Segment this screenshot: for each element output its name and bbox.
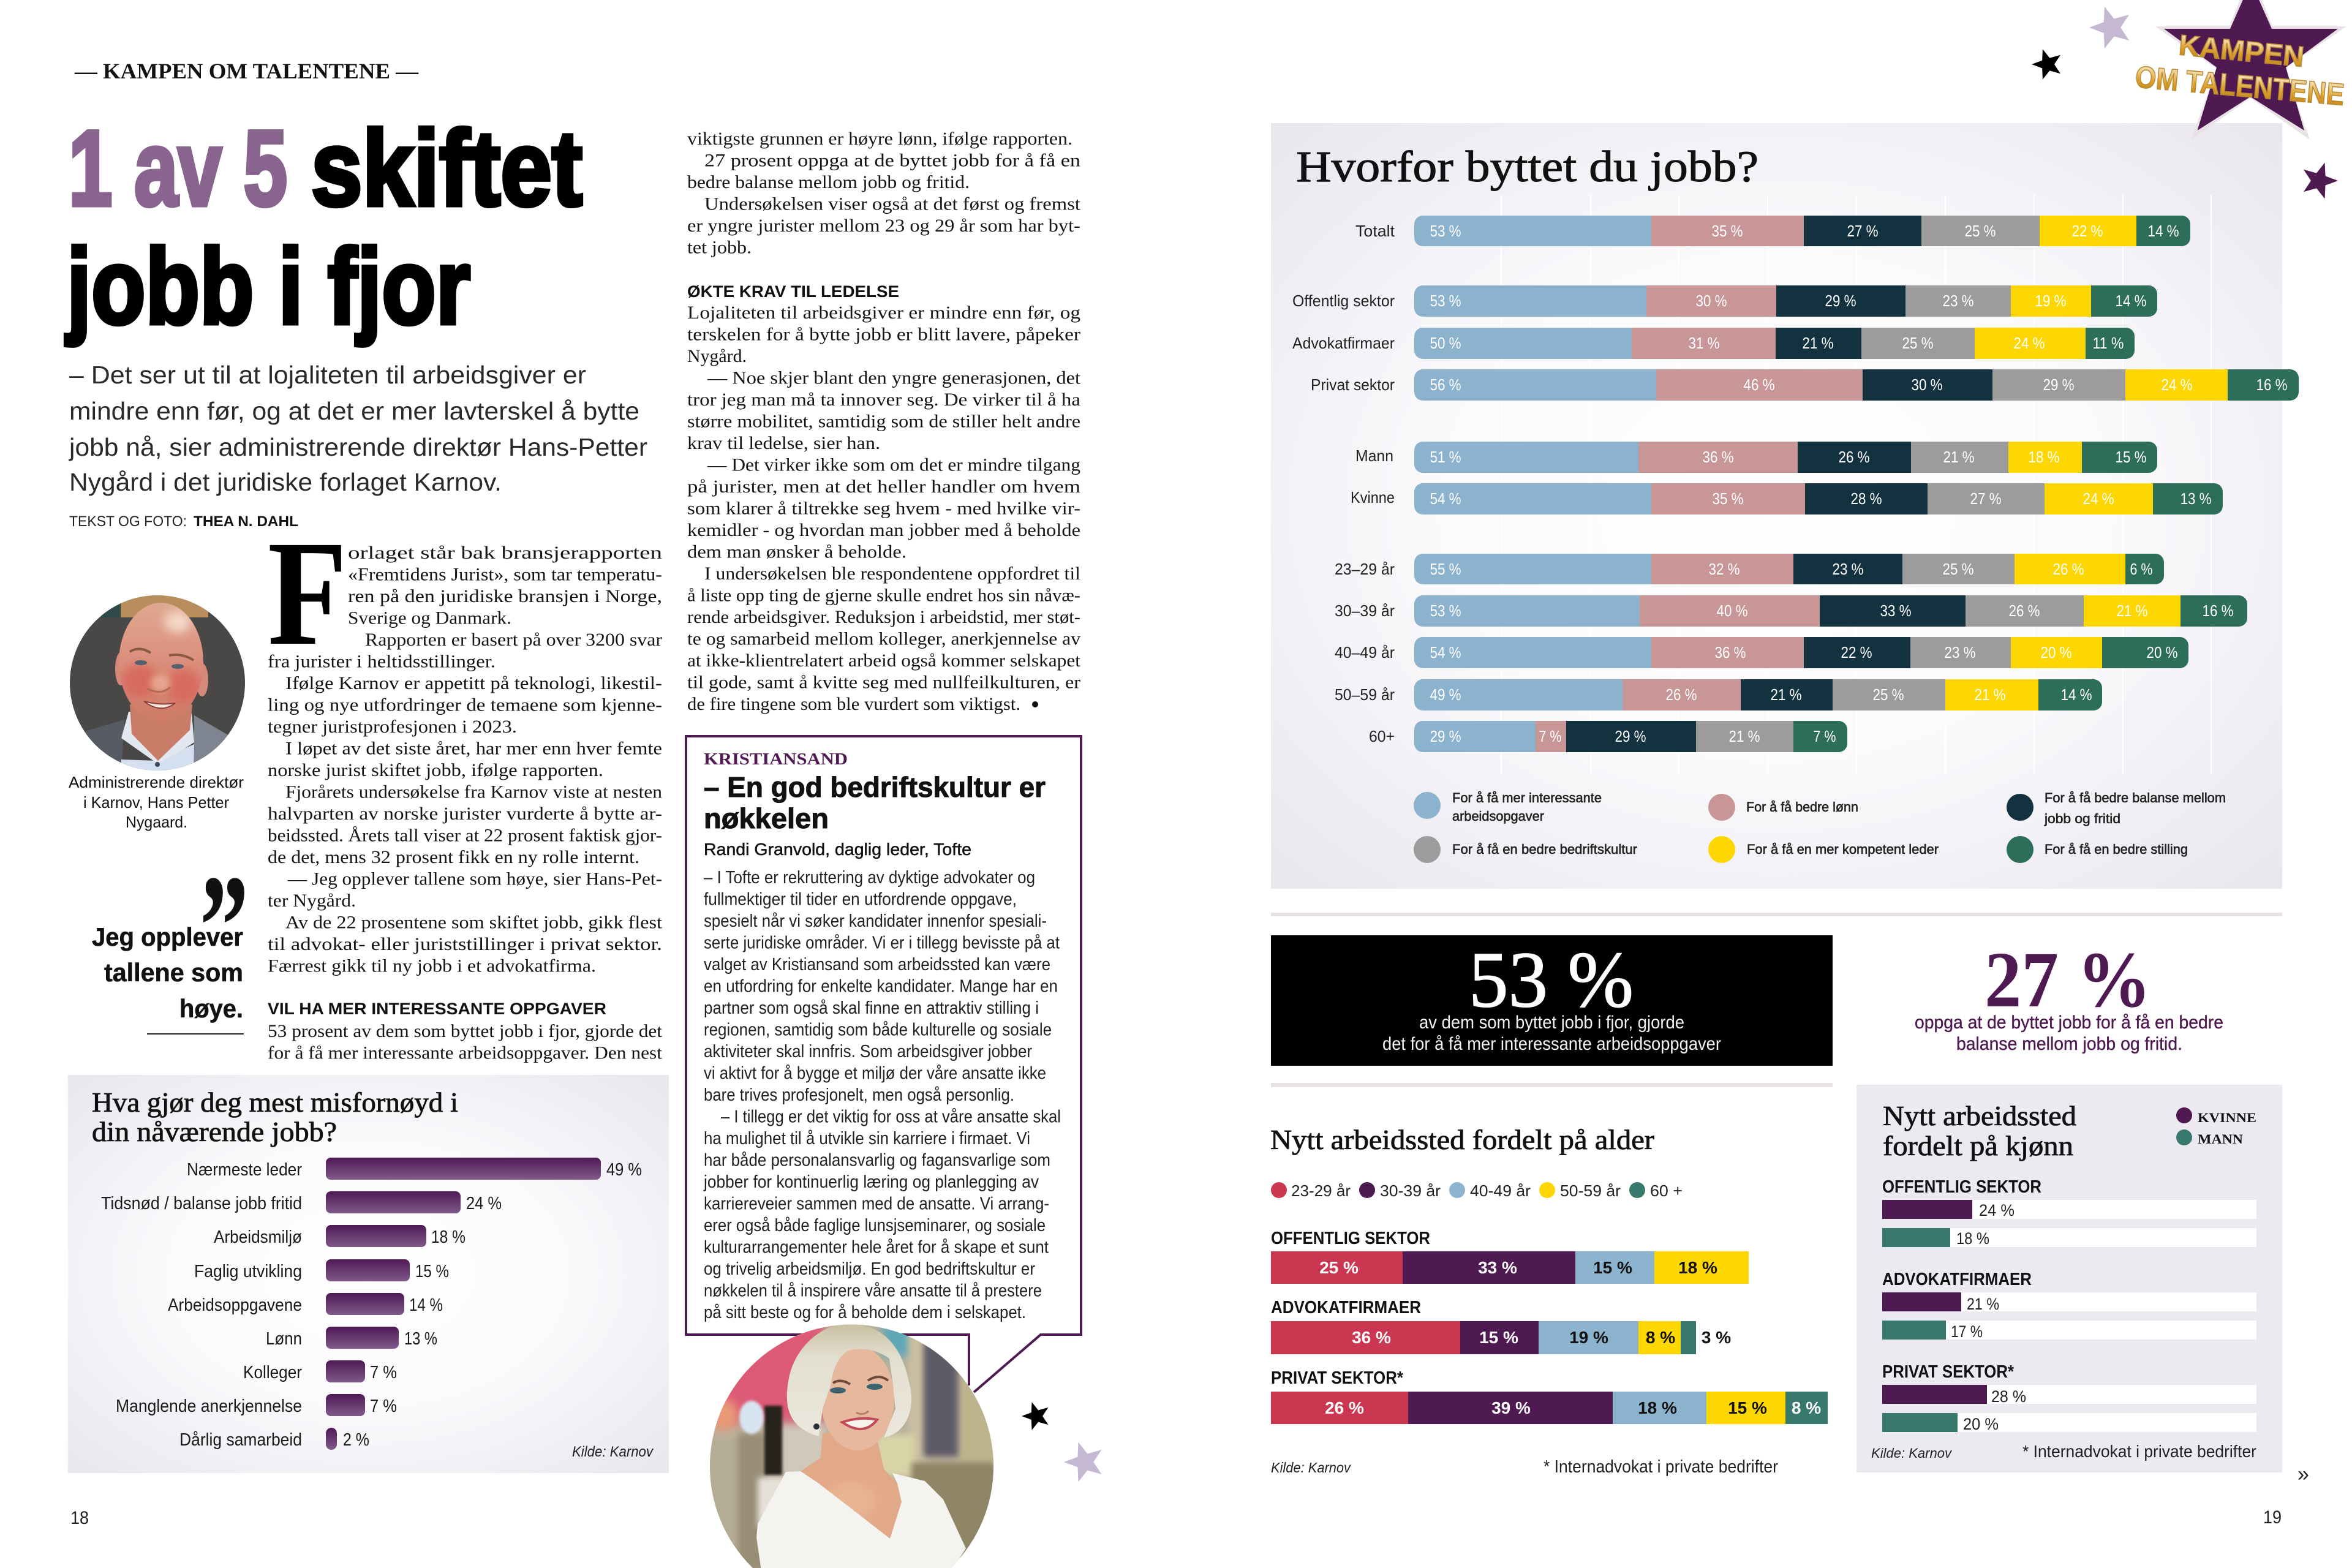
body text column 2: — Det virker ikke som om det er mindre tilgang [707, 454, 1080, 475]
callout body text: vi aktivt for å bygge et miljø der våre ansatte ikke [704, 1063, 1046, 1083]
stacked bar: 60+: 29 % [1430, 727, 1461, 745]
stacked bar: 60+: 21 % [1728, 727, 1760, 745]
drop cap F: F [268, 510, 347, 677]
stacked bar: Privat sektor: 30 % [1911, 375, 1943, 394]
stacked bar: Advokatfirmaer: 21 % [1802, 334, 1834, 352]
callout body text: aktiviteter skal innfris. Som arbeidsgiver jobber [704, 1042, 1032, 1061]
chart legend: jobb og fritid [2044, 811, 2120, 826]
stacked bar: 40-49 år [1335, 637, 2188, 668]
stacked bar: Kvinne [1351, 483, 2223, 514]
horizontal bar chart: Tidsnød / balanse jobb fritid [101, 1194, 302, 1213]
chart legend: For å få en bedre stilling [2045, 842, 2188, 857]
bars: privat sektor: 28 % [1991, 1387, 2026, 1406]
stacked bar: Advokatfirmaer: 25 % [1902, 334, 1933, 352]
icon: lilac star left page [1064, 1442, 1102, 1482]
stacked bar: 30-39 år [1335, 595, 2247, 627]
body text column 1: Rapporten er basert på over 3200 svar [365, 630, 662, 650]
stacked bar: 30-39 år: 21 % [2117, 601, 2147, 620]
stacked bar: Totalt: 35 % [1711, 222, 1743, 240]
body text column 2: viktigste grunnen er høyre lønn, ifølge rapporten. [687, 129, 1072, 149]
callout headline [704, 771, 1046, 834]
stacked bar: 50-59 år: 21 % [1770, 685, 1802, 704]
stacked bar: Kvinne: 35 % [1713, 489, 1743, 508]
stacked bar: 50-59 år: 50–59 år [1335, 685, 1395, 704]
chart legend: For å få en mer kompetent leder [1747, 842, 1939, 857]
panel: Hvorfor byttet du jobb [1271, 123, 2299, 889]
bars: privat sektor: PRIVAT SEKTOR* [1882, 1362, 2015, 1382]
bars: privat sektor [1882, 1362, 2256, 1433]
page number 19: 19 [2263, 1507, 2282, 1528]
source note and footnote [1271, 1457, 1778, 1477]
body text column 2: til gode, samt å kvitte seg med nullfeilkulturen, er [687, 673, 1080, 692]
body text column 1: halvparten av norske jurister vurderte å bytte ar- [268, 804, 662, 824]
stacked bar: Kvinne: Kvinne [1351, 488, 1395, 507]
stacked bar: Mann: 36 % [1703, 448, 1733, 466]
stacked bar: 40-49 år: 54 % [1430, 643, 1461, 662]
body text column 2: større mobilitet, samtidig som de stiller helt andre [687, 412, 1080, 431]
callout body text: en utfordring for enkelte kandidater. Mange har en [704, 976, 1058, 996]
callout body text: fullmektiger til tider en utfordrende oppgave, [704, 889, 1017, 909]
stacked bar: Mann: 15 % [2116, 448, 2146, 466]
gender legend: KVINNE [2198, 1110, 2256, 1125]
callout headline: – En god bedriftskultur er [704, 771, 1046, 803]
body text column 2: ØKTE KRAV TIL LEDELSE [687, 282, 899, 301]
body text column 2: rende arbeidsgiver. Reduksjon i arbeidstid, mer støt- [687, 607, 1080, 627]
stacked bar: 23-29 år: 6 % [2130, 560, 2152, 578]
stacked bar: Offentlig sektor: Offentlig sektor [1292, 292, 1395, 310]
stacked bar: Privat sektor: 29 % [2043, 375, 2074, 394]
body text column 2: å liste opp ting de gjerne skulle endret hos sin nåvæ- [687, 586, 1080, 605]
stacked bar: 23-29 år: 23 % [1833, 560, 1863, 578]
stacked bar: Kvinne: 28 % [1851, 489, 1882, 508]
stacked bar: Advokatfirmaer [1292, 328, 2135, 359]
stacked bar: Advokatfirmaer: 50 % [1430, 334, 1461, 352]
bars: offentlig sektor: OFFENTLIG SEKTOR [1882, 1177, 2041, 1197]
main headline [66, 109, 582, 347]
bars: advokatfirmaer: 17 % [1951, 1322, 1983, 1341]
age legend: 60 + [1650, 1182, 1683, 1200]
stacked bar: Privat sektor: 56 % [1430, 375, 1461, 394]
icon: black star top [2032, 49, 2060, 80]
stacked bar: 50-59 år: 49 % [1430, 685, 1461, 704]
stacked bar: 30-39 år: 40 % [1716, 601, 1748, 620]
horizontal bar chart: Arbeidsoppgavene [168, 1295, 302, 1315]
horizontal bar chart: 15 % [415, 1262, 449, 1281]
body text column 1: I løpet av det siste året, har mer enn hver femte [285, 739, 662, 758]
byline: TEKST OG FOTO: [69, 513, 187, 530]
bars: offentlig sektor: 18 % [1956, 1229, 1989, 1248]
stacked bar: Mann: Mann [1355, 447, 1393, 465]
icon: purple star right [2297, 157, 2342, 201]
bar: offentlig sektor: 18 % [1678, 1258, 1717, 1277]
body text column 1: VIL HA MER INTERESSANTE OPPGAVER [268, 1000, 606, 1018]
stat: 27 %: balanse mellom jobb og fritid. [1956, 1034, 2182, 1054]
bars: advokatfirmaer [1882, 1270, 2256, 1341]
stacked bar: 60+: 29 % [1615, 727, 1646, 745]
horizontal bar chart: 49 % [606, 1160, 642, 1180]
chart legend: arbeidsopgaver [1452, 809, 1544, 824]
bar: advokatfirmaer: 3 % [1702, 1328, 1731, 1347]
chart legend: For å få mer interessante [1452, 790, 1602, 805]
stacked bar: Privat sektor: 24 % [2161, 375, 2193, 394]
callout body text: kulturarrangementer hele året for å skape et sunt [704, 1237, 1049, 1257]
body text column 2: terskelen for å bytte jobb er blitt lavere, påpeker [687, 325, 1080, 344]
stacked bar: Mann: 51 % [1430, 448, 1461, 466]
horizontal bar chart: 7 % [370, 1363, 397, 1382]
standfirst: mindre enn før, og at det er mer lavterskel å bytte [69, 397, 639, 425]
callout body text: – I tillegg er det viktig for oss at våre ansatte skal [721, 1107, 1061, 1127]
horizontal bar chart: 2 % [343, 1430, 369, 1450]
body text column 2: I undersøkelsen ble respondentene oppfordret til [704, 564, 1080, 584]
gender legend [2176, 1107, 2256, 1147]
body text column 1: ling og nye utfordringer de temaene som kjenne- [268, 695, 662, 715]
stacked bar: 23-29 år: 32 % [1709, 560, 1740, 578]
panel title [1883, 1101, 2076, 1161]
stacked bar: Privat sektor: Privat sektor [1311, 375, 1395, 394]
photo caption: i Karnov, Hans Petter [83, 793, 229, 812]
chart legend: For å få bedre balanse mellom [2045, 790, 2226, 805]
bar: privat sektor: 8 % [1792, 1398, 1821, 1417]
body text column 1: orlaget står bak bransjerapporten [348, 543, 662, 563]
body text column 2: Nygård. [687, 346, 747, 366]
callout body text: jobber for kontinuerlig læring og planlegging av [703, 1172, 1039, 1192]
body text column 2: at ikke-klientrelatert arbeid også kommer selskapet [687, 650, 1081, 671]
bar: offentlig sektor: OFFENTLIG SEKTOR [1271, 1229, 1430, 1248]
callout body text: på sitt beste og for å beholde dem i selskapet. [704, 1303, 1026, 1322]
stacked bar: 30-39 år: 53 % [1430, 601, 1461, 620]
body text column 1 [268, 543, 663, 1063]
panel title: Nytt arbeidssted [1883, 1101, 2076, 1131]
callout body text: serte juridiske områder. Vi er i tillegg bevisste på at [704, 933, 1060, 953]
callout kicker: KRISTIANSAND [704, 750, 848, 768]
pull quote: høye. [179, 994, 243, 1023]
photo caption: Nygaard. [126, 813, 187, 831]
photo caption [69, 773, 244, 831]
bar: advokatfirmaer: ADVOKATFIRMAER [1271, 1298, 1421, 1317]
standfirst: Nygård i det juridiske forlaget Karnov. [69, 468, 502, 496]
body text column 2: 27 prosent oppga at de byttet jobb for å få en [704, 151, 1080, 170]
body text column 2: tror jeg man må ta innover seg. De virker til å ha [687, 390, 1080, 410]
horizontal bar chart: Lønn [266, 1329, 302, 1349]
badge: Kampen om talentene star [2134, 0, 2346, 140]
horizontal bar chart: Manglende anerkjennelse [116, 1396, 302, 1416]
horizontal bar chart: Kolleger [243, 1363, 302, 1382]
stacked bar: Offentlig sektor: 53 % [1430, 292, 1461, 310]
bar: offentlig sektor: 33 % [1478, 1258, 1517, 1277]
horizontal bar chart [101, 1158, 642, 1450]
bar: privat sektor: 18 % [1638, 1398, 1677, 1417]
horizontal bar chart: 14 % [409, 1295, 443, 1315]
bar: advokatfirmaer: 8 % [1646, 1328, 1675, 1347]
bar: advokatfirmaer: 19 % [1569, 1328, 1608, 1347]
source note and footnote: * Internadvokat i private bedrifter [1544, 1457, 1778, 1477]
body text column 2: de fire tingene som ble vurdert som viktigst. [687, 694, 1020, 714]
body text column 1: de det, mens 32 prosent fikk en ny rolle internt. [268, 847, 639, 867]
stacked bar: Offentlig sektor [1292, 285, 2157, 317]
stacked bar: Privat sektor: 46 % [1743, 375, 1775, 394]
bar: privat sektor: 26 % [1325, 1398, 1364, 1417]
body text column 2: på jurister, men at det heller handler om hvem [687, 477, 1080, 497]
stacked bar: 50-59 år [1335, 679, 2102, 710]
panel: Hva gjør deg mest misfornøyd [68, 1075, 669, 1473]
stacked bar: Advokatfirmaer: 31 % [1688, 334, 1720, 352]
callout body text: bare trives profesjonelt, men også personlig. [704, 1085, 1014, 1105]
bar: offentlig sektor [1271, 1229, 1749, 1284]
callout body text: spesielt når vi søker kandidater innenfor spesiali- [704, 911, 1047, 931]
standfirst: jobb nå, sier administrerende direktør Hans-Petter [69, 433, 647, 461]
body text column 1: beidssted. Årets tall viser at 22 prosent faktisk gjor- [268, 826, 662, 845]
body text column 1: for å få mer interessante arbeidsoppgaver. Den nest [268, 1042, 663, 1063]
age legend: 50-59 år [1560, 1182, 1621, 1200]
stacked bar: Advokatfirmaer: Advokatfirmaer [1292, 334, 1395, 352]
callout body text: karriereveier sammen med de ansatte. Vi arrang- [704, 1194, 1049, 1214]
body text column 1: fra jurister i heltidsstillinger. [268, 652, 496, 671]
stacked bar: Mann: 21 % [1943, 448, 1975, 466]
body text column 1: Av de 22 prosentene som skiftet jobb, gikk flest [285, 913, 663, 932]
callout body text: erer også både faglige lunsjseminarer, og sosiale [704, 1216, 1046, 1235]
stacked bar: Totalt: Totalt [1355, 222, 1395, 240]
body text column 1: Fjorårets undersøkelse fra Karnov viste at nesten [285, 782, 662, 802]
stacked bar: 60+ [1369, 721, 1847, 752]
stacked bar: 40-49 år: 22 % [1841, 643, 1872, 662]
main headline: jobb i fjor [66, 227, 470, 347]
body text column 1: Ifølge Karnov er appetitt på teknologi, likestil- [285, 673, 662, 693]
stacked bar: Offentlig sektor: 30 % [1695, 292, 1727, 310]
bar: privat sektor: 39 % [1491, 1398, 1531, 1417]
body text column 1: norske jurist skiftet jobb, ifølge rapporten. [268, 760, 603, 780]
stacked bar: 23-29 år: 26 % [2053, 560, 2084, 578]
stacked bar: Kvinne: 54 % [1430, 489, 1461, 508]
callout byline: Randi Granvold, daglig leder, Tofte [704, 840, 971, 859]
callout body text: ha mulighet til å utvikle sin karriere i firmaet. Vi [704, 1129, 1030, 1148]
source note and footnote: Kilde: Karnov [1871, 1446, 1953, 1461]
callout body text: regionen, samtidig som både kulturelle og sosiale [704, 1020, 1052, 1040]
source note and footnote: Kilde: Karnov [1271, 1460, 1351, 1476]
stacked bar: Totalt [1355, 216, 2190, 246]
panel title: fordelt på kjønn [1883, 1131, 2073, 1161]
pull quote: ” [200, 845, 249, 1008]
stacked bar: Advokatfirmaer: 24 % [2014, 334, 2045, 352]
stacked bar: Offentlig sektor: 23 % [1943, 292, 1973, 310]
standfirst [69, 361, 647, 496]
main headline: 1 av 5 [69, 109, 287, 228]
stacked bar: Offentlig sektor: 19 % [2035, 292, 2067, 310]
bar: privat sektor: PRIVAT SEKTOR* [1271, 1368, 1404, 1388]
horizontal bar chart: Dårlig samarbeid [179, 1430, 302, 1450]
body text column 1: ren på den juridiske bransjen i Norge, [348, 586, 662, 606]
horizontal bar chart: 18 % [431, 1227, 466, 1247]
stacked bar: Totalt: 25 % [1965, 222, 1996, 240]
stacked bar: 23-29 år: 23–29 år [1335, 560, 1395, 578]
stacked bar: 23-29 år: 55 % [1430, 560, 1461, 578]
pull quote: tallene som [104, 958, 243, 987]
horizontal bar chart: Arbeidsmiljø [214, 1227, 302, 1247]
body text column 2 [687, 129, 1081, 714]
body text column 2: te og samarbeid mellom kolleger, anerkjennelse av [687, 628, 1080, 649]
standfirst: – Det ser ut til at lojaliteten til arbeidsgiver er [69, 361, 586, 389]
chart legend [1414, 790, 2226, 863]
stacked bar: 40-49 år: 23 % [1944, 643, 1976, 662]
chart title: Nytt arbeidssted fordelt på alder [1270, 1125, 1654, 1155]
stacked bar: Totalt: 22 % [2071, 222, 2103, 240]
chart grid lines [1501, 195, 2211, 774]
photo caption: Administrerende direktør [69, 773, 244, 791]
stacked bar: Totalt: 14 % [2147, 222, 2179, 240]
bar: advokatfirmaer: 15 % [1479, 1328, 1518, 1347]
chart legend: For å få bedre lønn [1746, 799, 1858, 815]
stacked bar: 30-39 år: 30–39 år [1335, 601, 1395, 620]
callout body text [703, 868, 1061, 1322]
bar: advokatfirmaer: 36 % [1352, 1328, 1391, 1347]
page number 18: 18 [70, 1508, 89, 1528]
body text column 1: ter Nygård. [268, 891, 356, 911]
body text column 1: 53 prosent av dem som byttet jobb i fjor, gjorde det [268, 1021, 663, 1041]
stacked bar: Offentlig sektor: 29 % [1825, 292, 1856, 310]
bars: advokatfirmaer: 21 % [1967, 1295, 1999, 1313]
gender legend: MANN [2198, 1131, 2243, 1147]
stacked bar: 30-39 år: 33 % [1880, 601, 1911, 620]
bar: privat sektor: 15 % [1728, 1398, 1767, 1417]
stat box: 53 %: det for å få mer interessante arbeidsoppgaver [1382, 1034, 1721, 1054]
bars: privat sektor: 20 % [1963, 1415, 1999, 1433]
stacked bar: Kvinne: 27 % [1970, 489, 2002, 508]
callout headline: nøkkelen [704, 802, 829, 834]
bar: privat sektor [1271, 1368, 1828, 1424]
stacked bar: 23-29 år: 25 % [1943, 560, 1973, 578]
body text column 2: Lojaliteten til arbeidsgiver er mindre enn før, og [687, 303, 1080, 323]
badge: Kampen om talentene star: KAMPEN [2177, 28, 2305, 73]
source note: Kilde: Karnov [572, 1444, 654, 1460]
body text column 2: tet jobb. [687, 238, 752, 257]
main headline: skiftet [311, 109, 582, 228]
stacked bar: Privat sektor: 16 % [2256, 375, 2287, 394]
kicker: section label: — KAMPEN OM TALENTENE — [74, 59, 419, 83]
body text column 1: «Fremtidens Jurist», som tar temperatu- [348, 565, 662, 584]
stacked bar: 50-59 år: 14 % [2060, 685, 2092, 704]
source note and footnote [1871, 1442, 2256, 1461]
stacked bar: 30-39 år: 26 % [2009, 601, 2040, 620]
stacked bar: Kvinne: 13 % [2180, 489, 2211, 508]
bar: advokatfirmaer [1271, 1298, 1731, 1354]
stacked bar: 50-59 år: 26 % [1666, 685, 1697, 704]
body text column 1: Færrest gikk til ny jobb i et advokatfirma. [268, 956, 596, 976]
continuation arrow: » [2297, 1463, 2309, 1486]
source note and footnote: * Internadvokat i private bedrifter [2022, 1442, 2256, 1461]
body text column 2: dem man ønsker å beholde. [687, 541, 907, 562]
stacked bar: 40-49 år: 20 % [2041, 643, 2071, 662]
stacked bar: 50-59 år: 25 % [1873, 685, 1904, 704]
stacked bar: 50-59 år: 21 % [1975, 685, 2005, 704]
stat box: 53 %: av dem som byttet jobb i fjor, gjorde [1419, 1012, 1684, 1033]
bars: advokatfirmaer: ADVOKATFIRMAER [1882, 1270, 2032, 1289]
panel: Nytt arbeidssted fordelt på kjønn [1856, 1085, 2282, 1472]
stacked bar: Totalt: 27 % [1847, 222, 1878, 240]
stacked bar: Kvinne: 24 % [2082, 489, 2114, 508]
stacked bar: 40-49 år: 36 % [1715, 643, 1746, 662]
panel title: Hva gjør deg mest misfornøyd i [92, 1087, 458, 1118]
panel title: Hvorfor byttet du jobb? [1296, 142, 1758, 191]
body text column 2: krav til ledelse, sier han. [687, 433, 880, 453]
stacked bar: Totalt: 53 % [1430, 222, 1461, 240]
callout body text: partner som også skal finne en attraktiv stilling i [704, 998, 1039, 1018]
body text column 1: — Jeg opplever tallene som høye, sier Hans-Pet- [287, 869, 662, 889]
age legend: 40-49 år [1470, 1182, 1531, 1200]
callout: Kristiansand speech box [686, 736, 1081, 1392]
bars: offentlig sektor: 24 % [1979, 1201, 2015, 1219]
body text column 2: bedre balanse mellom jobb og fritid. [687, 172, 970, 192]
age legend: 23-29 år [1291, 1182, 1351, 1200]
stat: 27 %: oppga at de byttet jobb for å få en bedre [1915, 1012, 2223, 1033]
stacked bar: 30-39 år: 16 % [2203, 601, 2233, 620]
stacked bar: 60+: 7 % [1813, 727, 1836, 745]
bars: offentlig sektor [1882, 1177, 2256, 1248]
stacked bar: Mann [1355, 442, 2157, 473]
body text column 1: til advokat- eller juriststillinger i privat sektor. [268, 934, 662, 954]
body text column 1: Sverige og Danmark. [348, 608, 511, 628]
chart: Nytt arbeidssted fordelt på alder [1270, 1125, 1828, 1477]
pull quote: Jeg opplever [92, 922, 243, 951]
body text column 2: kemidler - og hvordan man jobber med å beholde [687, 520, 1080, 540]
stat: 27 % [1915, 936, 2223, 1054]
callout body text: – I Tofte er rekruttering av dyktige advokater og [704, 868, 1035, 888]
stacked bar: 40-49 år: 20 % [2146, 643, 2178, 662]
body text column 2: Undersøkelsen viser også at det først og fremst [704, 194, 1081, 214]
byline: THEA N. DAHL [194, 513, 298, 530]
photo: portrait of Hans-Petter Nygård [67, 593, 248, 774]
stacked bar: Advokatfirmaer: 11 % [2092, 334, 2124, 352]
body text column 2: er yngre jurister mellom 23 og 29 år som har byt- [687, 216, 1080, 236]
horizontal bar chart: 24 % [466, 1194, 502, 1213]
callout body text: har både personalansvarlig og fagansvarlige som [704, 1150, 1050, 1170]
panel title: din nåværende jobb? [92, 1117, 337, 1147]
stacked bar: Mann: 26 % [1839, 448, 1869, 466]
age legend [1271, 1182, 1683, 1200]
stacked bar: Offentlig sektor: 14 % [2116, 292, 2146, 310]
horizontal bar chart: Faglig utvikling [194, 1262, 302, 1281]
icon: black star left page [1022, 1402, 1048, 1430]
stat: 27 %: 27 % [1985, 936, 2151, 1024]
horizontal bar chart: Nærmeste leder [187, 1160, 302, 1180]
horizontal bar chart: 7 % [370, 1396, 397, 1416]
body text column 1: tegner juristprofesjonen i 2023. [268, 717, 517, 737]
stacked bar: 23-29 år [1335, 554, 2164, 584]
callout body text: nøkkelen til å inspirere våre ansatte til å prestere [704, 1281, 1042, 1301]
photo: portrait of Randi Granvold [704, 1317, 1000, 1568]
stacked bar: Privat sektor [1311, 369, 2299, 401]
body text column 2: — Noe skjer blant den yngre generasjonen, det [707, 368, 1081, 388]
stacked bar: Mann: 18 % [2029, 448, 2059, 466]
bar: offentlig sektor: 15 % [1593, 1258, 1632, 1277]
bar: offentlig sektor: 25 % [1319, 1258, 1359, 1277]
body text column 2: som klarer å tiltrekke seg hvem - med hvilke vir- [687, 499, 1080, 518]
stacked bar: 40-49 år: 40–49 år [1335, 643, 1395, 662]
pull quote [92, 845, 249, 1035]
byline [69, 513, 298, 530]
age legend: 30-39 år [1380, 1182, 1441, 1200]
panel title [92, 1087, 458, 1147]
callout body text: valget av Kristiansand som arbeidssted kan være [704, 955, 1050, 974]
stat box: 53 % [1271, 935, 1833, 1066]
stat box: 53 %: 53 % [1469, 936, 1634, 1024]
stacked bar: 60+: 60+ [1369, 727, 1395, 745]
stacked bar: 60+: 7 % [1539, 727, 1562, 745]
icon: lilac star top [2089, 7, 2129, 48]
chart legend: For å få en bedre bedriftskultur [1452, 842, 1637, 857]
horizontal bar chart: 13 % [404, 1329, 437, 1349]
callout body text: og trivelig arbeidsmiljø. En god bedriftskultur er [704, 1259, 1035, 1279]
